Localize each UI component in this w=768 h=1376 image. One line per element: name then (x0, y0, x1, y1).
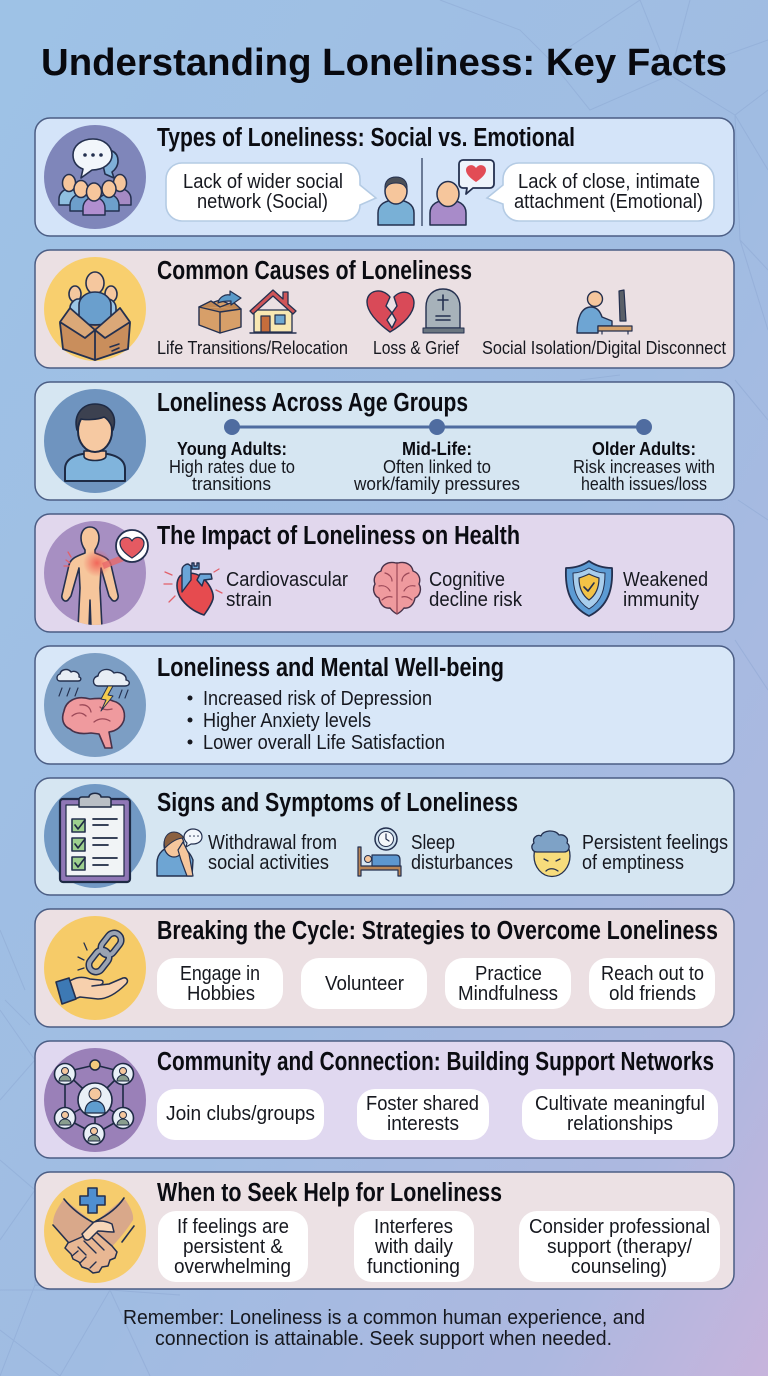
icon: broken heart (367, 291, 414, 332)
help pills: with daily (374, 1236, 453, 1258)
panel: when to seek help (35, 1172, 734, 1289)
bullet list: Increased risk of Depression (203, 688, 432, 710)
panel: community and connection (35, 1041, 734, 1158)
icon: house (250, 290, 296, 333)
item: cardiovascular: Cardiovascular (226, 569, 348, 591)
age group: young adults (169, 438, 295, 494)
icon: people in a box (44, 257, 146, 361)
help pills: persistent & (183, 1236, 284, 1258)
connection pills: relationships (567, 1113, 673, 1135)
age group: mid-life (353, 438, 520, 494)
cause labels: Loss & Grief (373, 337, 460, 358)
bullet list (188, 688, 445, 754)
callout: social: network (Social) (197, 191, 328, 213)
item: sleep (358, 828, 513, 876)
icon: person social (378, 177, 414, 225)
icon: clipboard checklist (44, 784, 146, 888)
help pills: If feelings are (177, 1216, 289, 1238)
heading: When to Seek Help for Loneliness (157, 1179, 502, 1207)
item: sleep: disturbances (411, 852, 513, 874)
item: emptiness: Persistent feelings (582, 832, 728, 854)
panel: signs and symptoms (35, 778, 734, 895)
icon: person emotional with heart bubble (430, 160, 494, 225)
panel: mental well-being (35, 646, 734, 764)
heading: Common Causes of Loneliness (157, 257, 472, 285)
callout: social: Lack of wider social (183, 171, 343, 193)
icon: person portrait (44, 389, 146, 493)
item: cognitive: decline risk (429, 589, 523, 611)
age group: young adults: transitions (192, 473, 271, 494)
footer note: Remember: Loneliness is a common human experience, and (123, 1307, 645, 1329)
item: withdrawal (157, 829, 337, 876)
strategy pills: Engage in (180, 963, 260, 985)
icon: hand with broken chain (44, 916, 146, 1020)
title: Understanding Loneliness: Key Facts (41, 42, 727, 84)
strategy pills: old friends (609, 983, 696, 1005)
age group: older adults: health issues/loss (581, 473, 707, 494)
connection pills: Foster shared (366, 1093, 479, 1115)
cause labels (157, 337, 726, 358)
age group: mid-life: work/family pressures (353, 473, 520, 494)
age group: young adults: High rates due to (169, 456, 295, 477)
icon: support network (44, 1048, 146, 1152)
panel: health impact (35, 514, 734, 632)
item: emptiness (532, 831, 728, 876)
icon: brain under storm clouds (44, 653, 146, 757)
item: emptiness: of emptiness (582, 852, 684, 874)
footer note (123, 1307, 645, 1350)
callout: emotional: Lack of close, intimate (518, 171, 700, 193)
callout: emotional: attachment (Emotional) (514, 191, 703, 213)
panel: common causes (35, 250, 734, 368)
connection pills: Join clubs/groups (166, 1103, 315, 1125)
cause labels: Life Transitions/Relocation (157, 337, 348, 358)
item: withdrawal: Withdrawal from (208, 832, 337, 854)
connection pills (157, 1089, 718, 1140)
heading: Loneliness and Mental Well-being (157, 654, 504, 682)
icon: tombstone (423, 289, 464, 333)
callout: social (166, 163, 376, 221)
item: immunity: Weakened (623, 569, 708, 591)
help pills: support (therapy/ (547, 1236, 692, 1258)
item: withdrawal: social activities (208, 852, 329, 874)
help pills: Interferes (374, 1216, 453, 1238)
divider (421, 158, 423, 226)
panel: age groups (35, 382, 734, 500)
icon: moving box and arrow (199, 291, 241, 333)
item: immunity: immunity (623, 589, 699, 611)
icon: handshake with medical cross (44, 1179, 146, 1283)
timeline (224, 419, 652, 435)
help pills: overwhelming (174, 1256, 291, 1278)
age group: mid-life: Often linked to (383, 456, 491, 477)
callout: emotional (487, 163, 714, 221)
connection pills: interests (387, 1113, 459, 1135)
strategy pills: Hobbies (187, 983, 255, 1005)
age group: older adults: Risk increases with (573, 456, 715, 477)
bullet list: Lower overall Life Satisfaction (203, 732, 445, 754)
age group: older adults (573, 438, 715, 494)
help pills (158, 1211, 720, 1282)
heading: Signs and Symptoms of Loneliness (157, 789, 518, 817)
age group: older adults: Older Adults: (592, 438, 696, 459)
heading: Types of Loneliness: Social vs. Emotional (157, 124, 575, 152)
help pills: Consider professional (529, 1216, 710, 1238)
panel: types of loneliness (35, 118, 734, 236)
bullet list: Higher Anxiety levels (203, 710, 371, 732)
strategy pills: Mindfulness (458, 983, 558, 1005)
panel: breaking the cycle (35, 909, 734, 1027)
footer note: connection is attainable. Seek support when needed. (155, 1328, 612, 1350)
icon: person at computer (577, 290, 632, 334)
item: immunity (566, 561, 708, 616)
strategy pills: Practice (475, 963, 542, 985)
icon: group with speech bubbles (44, 125, 146, 229)
heading: Loneliness Across Age Groups (157, 389, 468, 417)
icon: body with heart (44, 521, 148, 628)
help pills: counseling) (571, 1256, 667, 1278)
strategy pills (157, 958, 715, 1009)
strategy pills: Reach out to (601, 963, 704, 985)
item: cardiovascular (164, 563, 348, 615)
heading: The Impact of Loneliness on Health (157, 522, 520, 550)
item: sleep: Sleep (411, 832, 455, 854)
age group: mid-life: Mid-Life: (402, 438, 472, 459)
help pills: functioning (367, 1256, 460, 1278)
strategy pills: Volunteer (325, 973, 404, 995)
cause labels: Social Isolation/Digital Disconnect (482, 337, 726, 358)
item: cardiovascular: strain (226, 589, 272, 611)
item: cognitive: Cognitive (429, 569, 505, 591)
connection pills: Cultivate meaningful (535, 1093, 705, 1115)
age group: young adults: Young Adults: (177, 438, 287, 459)
item: cognitive (374, 562, 523, 614)
